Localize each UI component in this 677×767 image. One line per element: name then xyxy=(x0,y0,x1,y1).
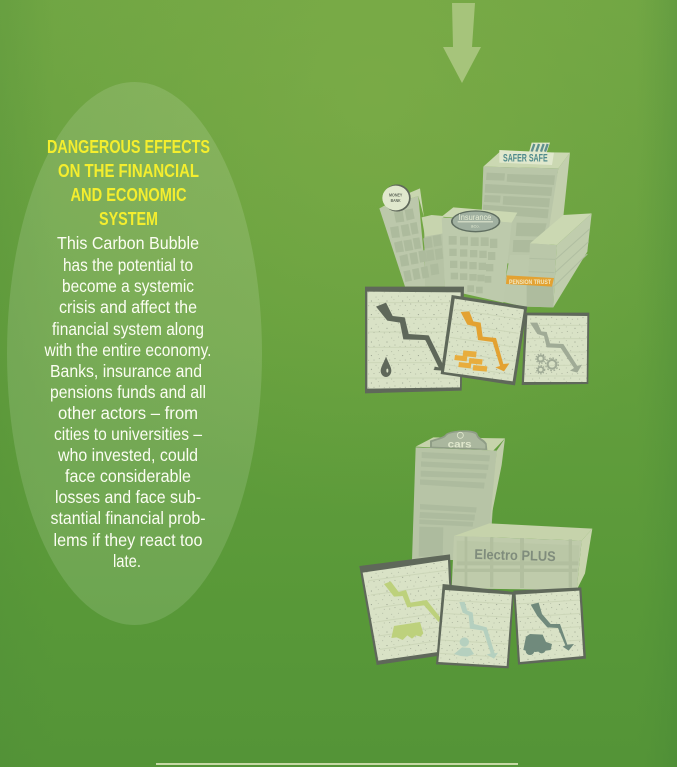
body text: face considerable xyxy=(65,466,191,486)
bottom rule xyxy=(156,763,518,765)
body text: become a systemic xyxy=(62,276,194,296)
chart: trucks xyxy=(359,554,455,665)
arrow pointing down xyxy=(443,3,481,83)
heading: SYSTEM xyxy=(99,208,158,229)
building: cars xyxy=(412,430,505,560)
building: Electro PLUS xyxy=(452,523,592,590)
icon: workers xyxy=(454,637,474,657)
body text: This Carbon Bubble xyxy=(57,233,199,253)
heading xyxy=(47,136,210,229)
body text: has the potential to xyxy=(63,255,193,275)
sign: Money Bank: BANK xyxy=(391,198,401,204)
chart: people xyxy=(436,584,514,668)
body text: Banks, insurance and xyxy=(50,361,202,381)
illustration: industry buildings and charts xyxy=(359,430,592,668)
body text: with the entire economy. xyxy=(44,340,212,360)
sign: Insurance: Insurance xyxy=(459,212,491,222)
chart: gears xyxy=(522,313,589,385)
heading: AND ECONOMIC xyxy=(70,184,186,205)
panel: text bubble xyxy=(7,82,262,625)
icon: gold bricks xyxy=(454,350,487,372)
chart: gold bricks xyxy=(441,295,527,385)
heading: DANGEROUS EFFECTS xyxy=(47,136,210,157)
sign: Money Bank: MONEY xyxy=(389,193,403,199)
building: Money Bank xyxy=(379,184,445,287)
body text: cities to universities – xyxy=(54,424,202,444)
building: Safer Safe xyxy=(480,143,570,263)
sign: Insurance: &Co. xyxy=(471,223,480,228)
body text: pensions funds and all xyxy=(50,382,206,402)
sign: solar panel xyxy=(529,143,550,153)
sign: Insurance xyxy=(451,210,500,232)
body text: lems if they react too xyxy=(54,530,202,550)
icon: oil drop xyxy=(381,357,391,377)
icon: gears xyxy=(536,354,558,374)
heading: ON THE FINANCIAL xyxy=(58,160,199,181)
building: Insurance xyxy=(442,207,517,303)
body text: late. xyxy=(113,551,141,571)
icon: car xyxy=(523,634,552,655)
body text: losses and face sub- xyxy=(55,487,201,507)
sign: Electro PLUS: Electro PLUS xyxy=(474,546,556,564)
sign: Pension Trust: PENSION TRUST xyxy=(509,279,551,286)
building: Pension Trust xyxy=(506,213,592,307)
body text: stantial financial prob- xyxy=(50,508,206,528)
body text: who invested, could xyxy=(57,445,198,465)
building: lower connector xyxy=(502,255,530,307)
sign: Safer Safe: SAFER SAFE xyxy=(503,152,548,164)
body text xyxy=(44,233,212,571)
icon: truck xyxy=(391,622,423,640)
body text: crisis and affect the xyxy=(59,297,197,317)
illustration: financial buildings and charts xyxy=(365,143,592,393)
sign: Money Bank xyxy=(382,184,411,212)
body text: other actors – from xyxy=(58,403,198,423)
sign: cars: cars xyxy=(448,440,472,451)
chart: oil xyxy=(365,287,464,393)
chart: car xyxy=(513,587,586,665)
body text: financial system along xyxy=(52,319,204,339)
